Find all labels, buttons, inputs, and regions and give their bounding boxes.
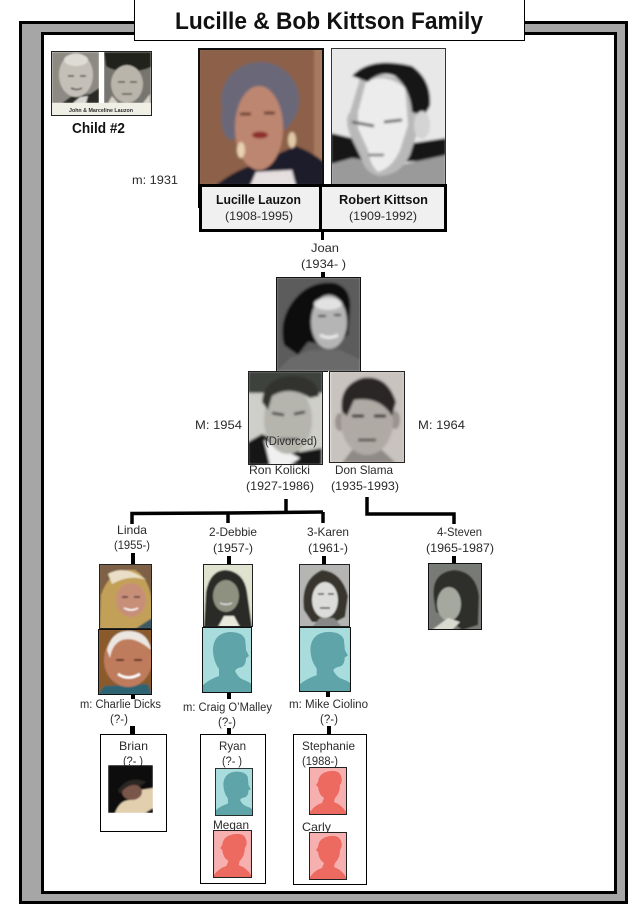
text: Don Slama: (1935-1993) xyxy=(331,479,399,493)
name box: Robert Kittson: (1909-1992) xyxy=(349,209,417,223)
connectors: spouses to labels xyxy=(131,692,330,699)
text: Ron Kolicki: (1927-1986) xyxy=(246,479,314,493)
photo: Debbie xyxy=(203,564,253,627)
silhouette: Mike Ciolino xyxy=(299,627,351,692)
text: Don Slama: Don Slama xyxy=(335,463,393,477)
text: Karen: (1961-) xyxy=(308,541,348,555)
text: Mike Ciolino: m: Mike Ciolino xyxy=(289,699,368,711)
photo: Lucille Lauzon xyxy=(198,48,324,185)
connector: Ron to children xyxy=(132,499,323,524)
text: marriage 1954: M: 1954 xyxy=(195,418,242,432)
name box: Lucille Lauzon: Lucille Lauzon xyxy=(216,193,301,207)
panel: Stephanie and Carly: Stephanie xyxy=(302,739,355,753)
text: Debbie: (1957-) xyxy=(213,541,253,555)
name box: Robert Kittson xyxy=(320,186,446,230)
photo: John and Marceline Lauzon parents xyxy=(52,52,152,116)
photo: Don Slama xyxy=(328,371,405,463)
connectors: labels to grandchildren xyxy=(130,726,331,735)
text: Linda xyxy=(114,523,150,552)
text: Mike Ciolino: (?-) xyxy=(320,714,338,726)
panel: Brian: (?- ) xyxy=(123,756,143,768)
photo: Karen xyxy=(299,564,350,627)
panel: Ryan and Megan: (?- ) xyxy=(222,756,242,768)
text: Joan: Joan xyxy=(311,241,339,255)
photo: Linda xyxy=(99,564,152,629)
photo: Charlie Dicks xyxy=(98,629,152,695)
text: marriage 1931: m: 1931 xyxy=(132,173,178,187)
panel: Ryan and Megan xyxy=(200,734,266,884)
text: Debbie xyxy=(209,525,257,555)
text: Steven: 4-Steven xyxy=(437,525,482,539)
text: Craig O'Malley: (?-) xyxy=(218,717,236,729)
text: Craig O'Malley xyxy=(183,702,272,729)
text: Karen: 3-Karen xyxy=(307,525,349,539)
text: marriage 1964: M: 1964 xyxy=(418,418,465,432)
photo: Robert Kittson xyxy=(331,48,446,184)
text: Debbie: 2-Debbie xyxy=(209,525,257,539)
name box: Lucille Lauzon: (1908-1995) xyxy=(225,209,293,223)
photo: Ron Kolicki xyxy=(248,371,323,465)
photo: Joan xyxy=(276,277,361,372)
text: Don Slama xyxy=(331,463,399,493)
text: Steven: (1965-1987) xyxy=(426,541,494,555)
panel: Brian xyxy=(100,734,166,832)
panel: Stephanie and Carly xyxy=(294,734,366,884)
panel: Brian: Brian xyxy=(119,739,148,753)
text: Charlie Dicks xyxy=(80,699,161,726)
title: Lucille & Bob Kittson Family xyxy=(175,8,483,35)
text: Joan: (1934- ) xyxy=(301,257,346,271)
silhouette: Megan xyxy=(213,830,252,878)
text: divorced: (Divorced) xyxy=(265,436,317,448)
photo: Steven xyxy=(428,563,482,630)
name box: Lucille Lauzon xyxy=(200,186,320,230)
connector: parents to Joan xyxy=(321,231,325,278)
silhouette: Carly xyxy=(309,832,347,880)
photo: Brian xyxy=(108,765,153,813)
text: Child #2: Child #2 xyxy=(72,121,125,137)
text: Charlie Dicks: (?-) xyxy=(110,714,128,726)
panel: Stephanie and Carly: Carly xyxy=(302,820,331,834)
name box: Robert Kittson: Robert Kittson xyxy=(339,193,428,207)
text: Linda: Linda xyxy=(117,523,147,537)
text: Charlie Dicks: m: Charlie Dicks xyxy=(80,699,161,711)
connector: Don to Steven xyxy=(367,497,454,524)
connector: Lucille left edge xyxy=(198,185,201,208)
text: Steven xyxy=(426,525,494,555)
text: Ron Kolicki: Ron Kolicki xyxy=(249,463,310,477)
silhouette: Stephanie xyxy=(309,767,347,815)
text: Joan xyxy=(301,241,346,271)
title xyxy=(134,0,524,40)
text: Linda: (1955-) xyxy=(114,538,150,552)
text: Ron Kolicki xyxy=(246,463,314,493)
text: Craig O'Malley: m: Craig O’Malley xyxy=(183,702,272,714)
text: Mike Ciolino xyxy=(289,699,368,726)
panel: Ryan and Megan: Ryan xyxy=(219,739,246,753)
connectors: child names to photos xyxy=(131,553,456,564)
silhouette: Craig O'Malley xyxy=(202,627,252,693)
panel: Ryan and Megan: Megan xyxy=(213,818,249,832)
panel: Stephanie and Carly: (1988-) xyxy=(302,756,338,768)
silhouette: Ryan xyxy=(215,768,253,816)
text: Karen xyxy=(307,525,349,555)
photo: John and Marceline Lauzon parents: John & Marceline Lauzon xyxy=(69,108,134,114)
